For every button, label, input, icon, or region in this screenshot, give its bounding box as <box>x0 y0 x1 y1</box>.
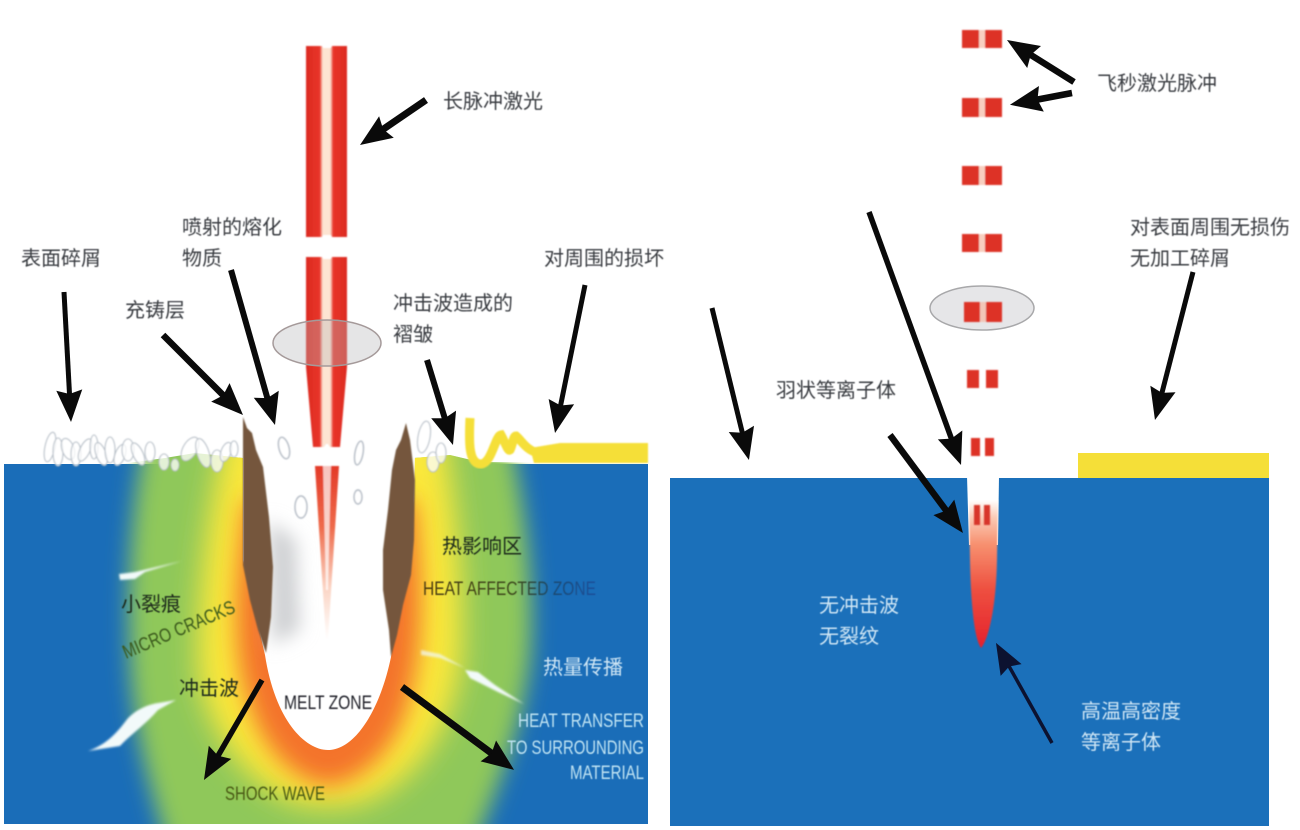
label: surface debris: 表面碎屑 <box>21 247 101 270</box>
label: heat affected zone en: HEAT AFFECTED ZONE <box>423 579 596 600</box>
arrow: femtosecond pulse 2 <box>1025 93 1072 102</box>
label: to surrounding: TO SURROUNDING <box>507 738 644 759</box>
surface debris <box>42 420 446 472</box>
label: femtosecond pulse: 飞秒激光脉冲 <box>1097 72 1217 95</box>
damage layer yellow <box>469 418 648 464</box>
label: high temp high density: 高温高密度 <box>1081 700 1181 723</box>
arrow: surface debris <box>64 292 70 407</box>
arrow: femtosecond pulse channel <box>869 212 956 451</box>
beam segment 3 <box>315 466 339 640</box>
arrow: ejected melt <box>231 270 271 411</box>
pulse 6 <box>967 370 998 388</box>
label: no shock wave: 无冲击波 <box>819 594 899 617</box>
label: ejected melt line 2: 物质 <box>182 247 222 270</box>
arrow: surrounding damage <box>558 285 585 418</box>
beam segment 2 <box>306 257 347 447</box>
long pulse laser beam <box>306 46 347 640</box>
pulse 3 <box>962 166 1002 185</box>
panel: femtosecond laser cross-section <box>670 453 1269 826</box>
pulse 2 <box>962 98 1002 117</box>
arrow: plume plasma <box>890 435 954 521</box>
femtosecond laser pulses <box>962 30 1002 525</box>
plasma plume <box>969 500 998 648</box>
melt zone cavity <box>243 400 416 750</box>
label: no cracks: 无裂纹 <box>819 625 879 648</box>
pulse 7 <box>971 438 994 456</box>
label: heat transfer en: HEAT TRANSFER <box>518 711 644 732</box>
pulse 1 <box>962 30 1002 48</box>
pulse 5 <box>964 302 1002 322</box>
label: heat transfer cn: 热量传播 <box>543 656 623 679</box>
channel <box>967 476 999 545</box>
arrow: long pulse laser <box>372 100 426 137</box>
arrow: femtosecond pulse 1 <box>1020 48 1074 82</box>
label: heat affected zone cn: 热影响区 <box>442 535 522 558</box>
focusing lens left <box>273 320 381 366</box>
label: shock ripples line 2: 褶皱 <box>393 323 433 346</box>
label: ejected melt: 喷射的熔化 <box>182 216 282 239</box>
beam segment 3 core <box>323 466 331 590</box>
label: shock wave en: SHOCK WAVE <box>225 784 325 805</box>
label: micro cracks en: MICRO CRACKS <box>120 597 238 664</box>
label: material: MATERIAL <box>570 763 644 784</box>
beam segment 1 <box>306 46 347 237</box>
arrow: no damage surface <box>1159 272 1193 406</box>
label: surrounding damage: 对周围的损坏 <box>544 247 664 270</box>
label: micro cracks cn: 小裂痕 <box>121 593 181 616</box>
panel: long pulse laser cross-section <box>4 400 648 830</box>
heat affected zone gradient <box>129 420 532 830</box>
arrow: surface right <box>712 308 745 445</box>
micro crack white streaks <box>88 561 524 751</box>
pulse 4 <box>962 234 1002 252</box>
arrow: shock wave <box>212 680 262 767</box>
label: plume plasma: 羽状等离子体 <box>776 379 896 402</box>
label: shock ripples: 冲击波造成的 <box>393 292 513 315</box>
label: long pulse laser: 长脉冲激光 <box>443 90 543 113</box>
arrow: heat transfer <box>402 687 502 761</box>
label: shock wave cn: 冲击波 <box>179 677 239 700</box>
recast layer left <box>243 417 273 653</box>
arrow: high density plasma <box>1003 656 1052 743</box>
label: plasma: 等离子体 <box>1081 731 1161 754</box>
shaded cavity wall <box>268 520 300 645</box>
arrow: recast layer <box>163 335 232 404</box>
ejected melt droplets <box>276 436 365 518</box>
material block right <box>670 478 1269 826</box>
material block left <box>4 464 648 824</box>
label: no debris: 无加工碎屑 <box>1130 247 1230 270</box>
recast layer right <box>383 423 415 657</box>
label: recast layer: 充铸层 <box>125 299 185 322</box>
non-damaged yellow surface <box>1078 453 1269 478</box>
label: melt zone: MELT ZONE <box>284 693 372 714</box>
pulse 8 <box>974 505 990 525</box>
focusing lens right <box>930 286 1034 330</box>
label: no surrounding damage: 对表面周围无损伤 <box>1130 216 1290 239</box>
arrow: shock wave ripples <box>427 360 449 431</box>
